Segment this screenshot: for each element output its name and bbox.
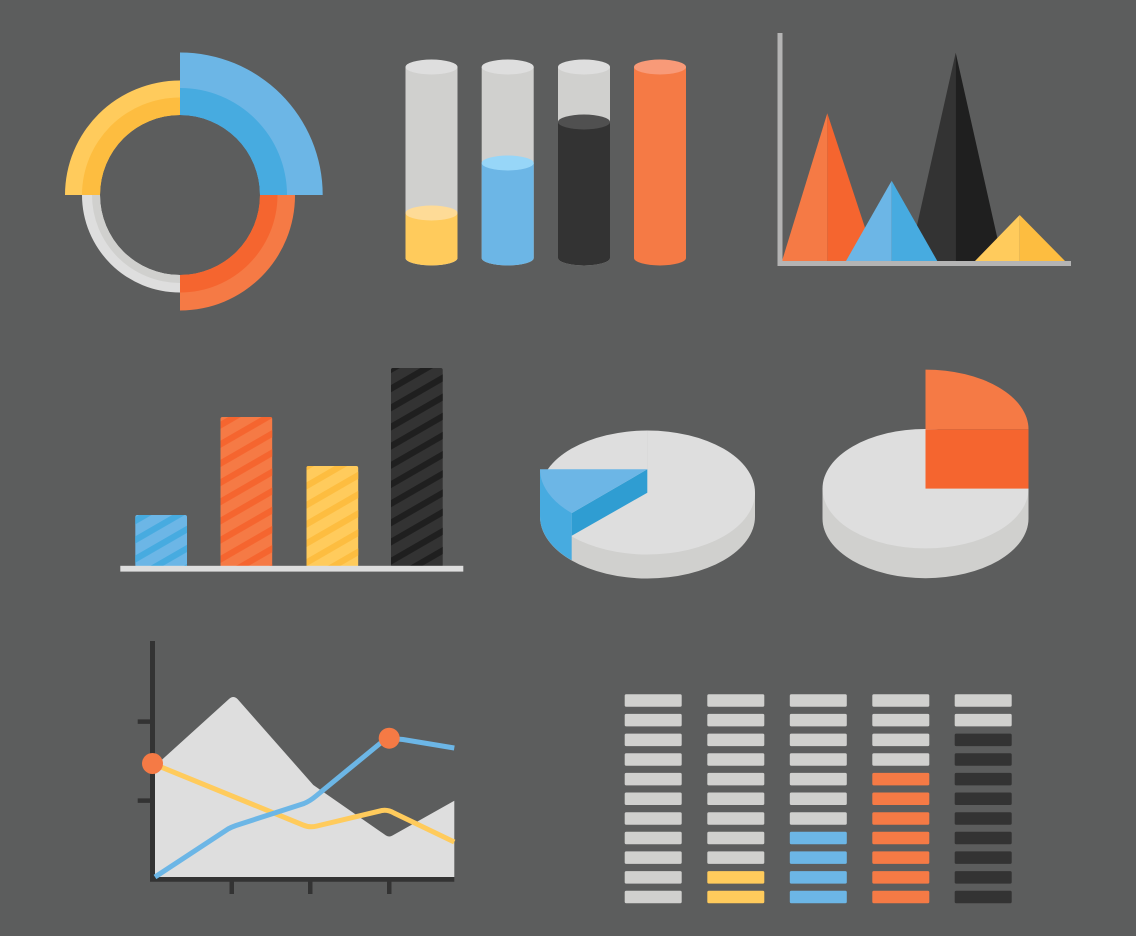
- orange marker left: [142, 753, 163, 774]
- striped bar chart: [120, 368, 463, 572]
- segment: blue: [180, 52, 323, 195]
- meter column 1: [625, 694, 682, 903]
- meter column 3: [790, 694, 847, 903]
- axes: [778, 33, 1071, 266]
- bar: blue: [135, 515, 187, 567]
- peak: blue: [846, 181, 937, 261]
- cylinder: blue: [482, 60, 534, 266]
- grey area: [155, 697, 454, 877]
- meter column 5: [955, 694, 1012, 903]
- segmented level meters: [625, 694, 1012, 903]
- orange marker right: [379, 728, 400, 749]
- yellow line: [152, 764, 454, 842]
- baseline: [120, 566, 463, 572]
- raised blue slice: [540, 469, 647, 560]
- bar: orange: [220, 417, 272, 567]
- axes and ticks: [138, 641, 454, 894]
- cylinder: orange: [634, 60, 686, 266]
- bar: yellow: [306, 466, 358, 567]
- cylinder: dark: [558, 60, 610, 266]
- line and area chart: [138, 641, 454, 894]
- 3D pie chart with orange slice: [822, 370, 1028, 578]
- blue line: [155, 739, 454, 877]
- segment: grey: [82, 195, 180, 292]
- bar: dark: [391, 368, 443, 567]
- peak: yellow: [975, 215, 1065, 261]
- cylinder gauges: [406, 60, 686, 266]
- pie body: [540, 430, 755, 578]
- peak: orange: [782, 113, 876, 261]
- 3D pie chart with blue slice: [540, 430, 755, 578]
- peak: dark: [909, 53, 1002, 261]
- segment: orange: [180, 195, 295, 310]
- meter column 2: [707, 694, 764, 903]
- segment: yellow: [65, 80, 180, 195]
- triangle peak chart: [778, 33, 1071, 266]
- cylinder: yellow: [406, 60, 458, 266]
- pie body: [822, 429, 1028, 578]
- meter column 4: [872, 694, 929, 903]
- radial donut chart: [65, 52, 323, 311]
- raised orange slice: [926, 370, 1028, 489]
